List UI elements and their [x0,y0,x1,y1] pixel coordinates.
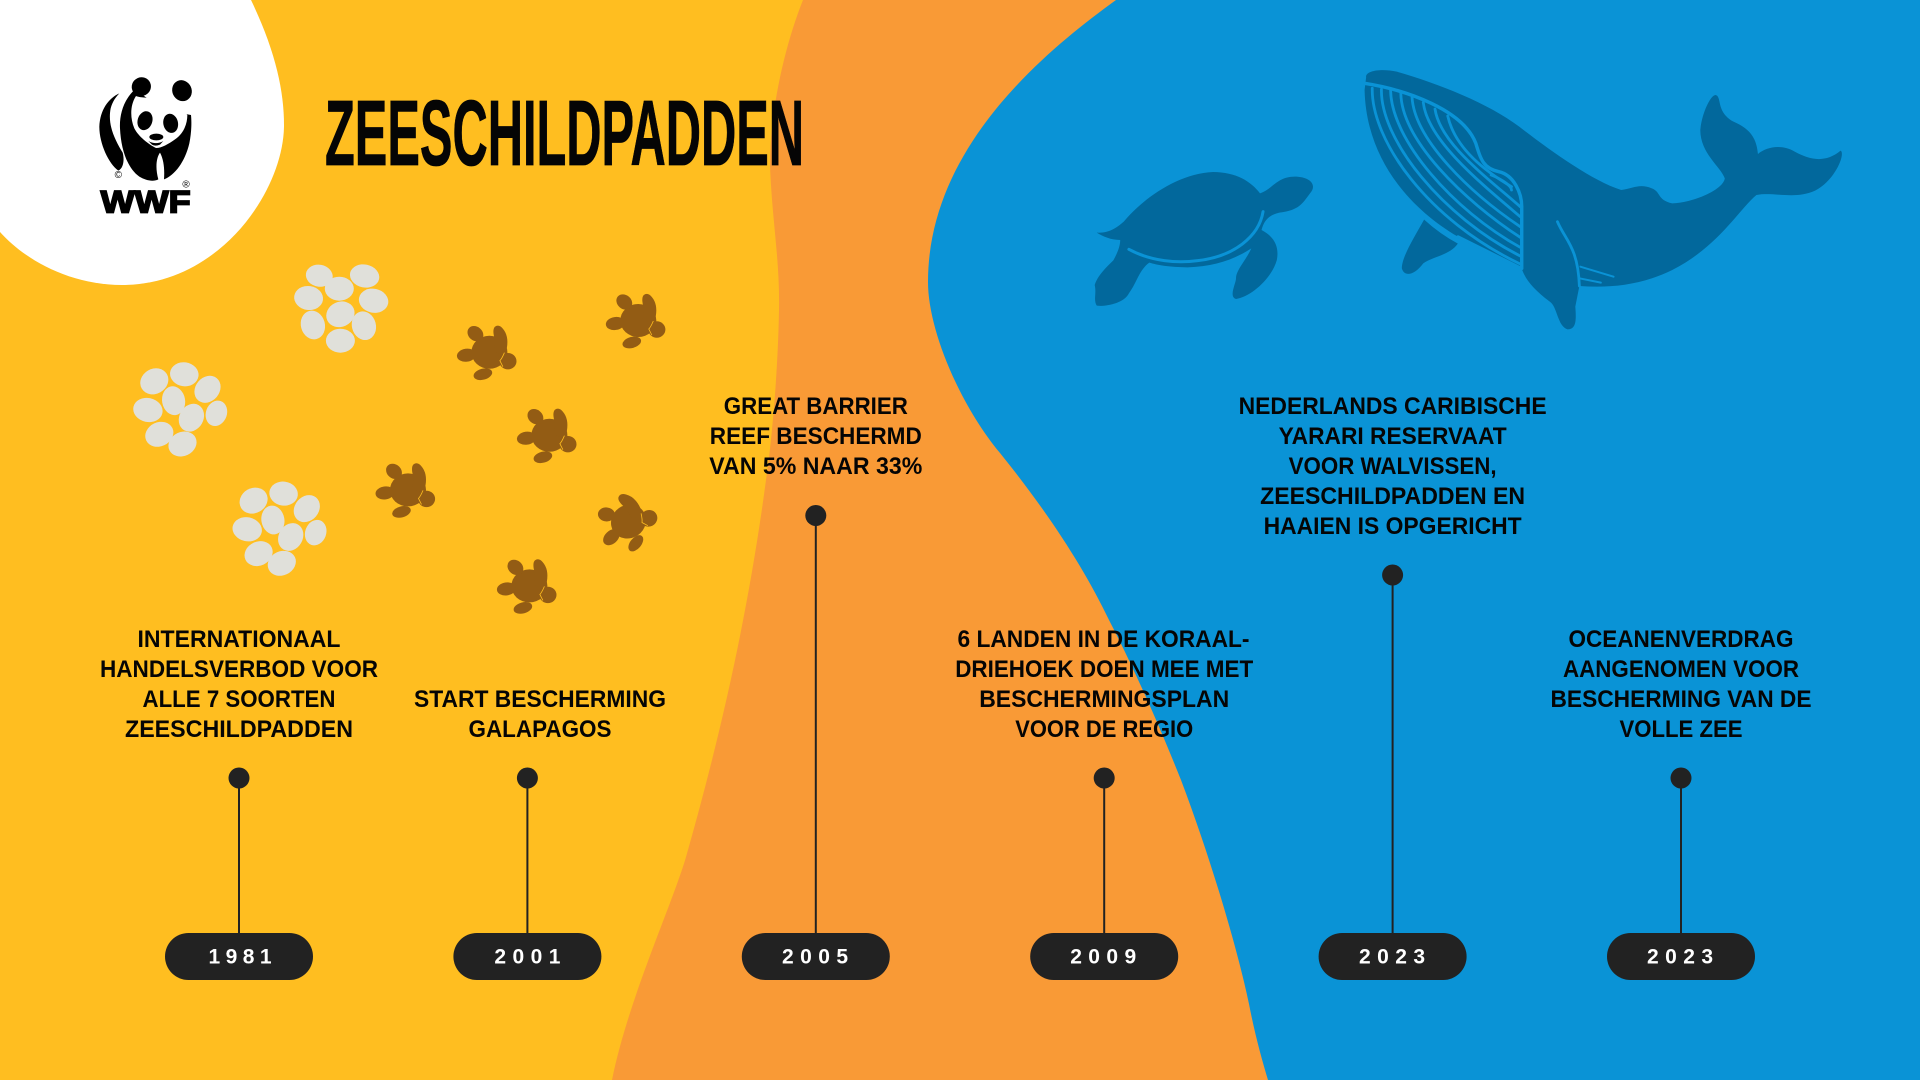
pill: 2009 [1030,933,1178,980]
turtle eggs: cluster top [293,262,391,353]
text: 2023 Yarari event: VOOR WALVISSEN, [1289,453,1497,480]
timeline item: 2009 [955,626,1254,980]
timeline item: 2005 [709,393,922,980]
text: 2009 event [955,626,1254,743]
pill: 2009: 2009 [1070,946,1136,968]
text: 2009 event: DRIEHOEK DOEN MEE MET [955,656,1254,683]
text: 2001 event [414,686,666,743]
pill: 2023 first: 2023 [1359,946,1425,968]
text: 1981 event: INTERNATIONAAL [138,626,340,653]
marker: 2009 stem [1094,768,1115,934]
text: 2023 Yarari event: HAAIEN IS OPGERICHT [1264,513,1522,540]
text: 2009 event: BESCHERMINGSPLAN [979,686,1229,713]
text: 2009 event: VOOR DE REGIO [1015,716,1193,743]
timeline item: 2023 Yarari [1239,393,1547,980]
text: 2023 Yarari event: ZEESCHILDPADDEN EN [1260,483,1525,510]
pill: 2023 second [1607,933,1755,980]
timeline item: 1981 [100,626,378,980]
background: blue ocean [928,0,1920,1080]
text: 2023 Oceanenverdrag event: OCEANENVERDRAG [1568,626,1794,653]
text: 2009 event: 6 LANDEN IN DE KORAAL- [958,626,1250,653]
pill: 2005: 2005 [782,946,848,968]
whale throat grooves [1365,83,1614,286]
pill: 1981: 1981 [208,946,272,968]
pill: 2023 second: 2023 [1647,946,1713,968]
pill: 2001 [453,933,601,980]
pill: 2005 [742,933,890,980]
text: 2005 event [709,393,922,480]
icon: WWF panda logo: © [115,170,123,181]
text: 1981 event [100,626,378,743]
text: 1981 event: HANDELSVERBOD VOOR [100,656,378,683]
text: 1981 event: ALLE 7 SOORTEN [142,686,336,713]
text: 2023 Oceanenverdrag event: VOLLE ZEE [1620,716,1742,743]
marker: 2023 Yarari stem [1382,564,1403,934]
whale body [1365,70,1842,329]
marker: 2005 stem [805,505,826,934]
marker: 2023 Oceanenverdrag stem [1670,768,1692,934]
turtle eggs: cluster bottom [230,480,330,580]
text: 2001 event: GALAPAGOS [468,716,612,743]
hatchling turtles [375,291,668,616]
icon: sea turtle silhouette [1095,172,1313,306]
text: 2005 event: GREAT BARRIER [724,393,908,420]
timeline item: 2001 [414,686,666,980]
icon: humpback whale silhouette [1365,70,1842,329]
text: 2023 Yarari event: NEDERLANDS CARIBISCHE [1239,393,1547,420]
marker: 1981 stem [228,768,250,934]
turtle eggs: cluster left [131,360,231,461]
title: ZEESCHILDPADDEN [325,81,804,185]
icon: WWF panda logo: ® [182,179,190,190]
icon: WWF panda logo: WWF [101,185,191,220]
text: 2023 Oceanenverdrag event: BESCHERMING VAN DE [1550,686,1812,713]
white logo blob [0,0,284,285]
text: 2023 Oceanenverdrag event [1550,626,1812,743]
text: 1981 event: ZEESCHILDPADDEN [125,716,353,743]
timeline item: 2023 Oceanenverdrag [1550,626,1812,980]
pill: 2001: 2001 [494,946,561,968]
text: 2001 event: START BESCHERMING [414,686,666,713]
pill: 2023 first [1319,933,1467,980]
text: 2023 Oceanenverdrag event: AANGENOMEN VOOR [1563,656,1799,683]
text: 2005 event: VAN 5% NAAR 33% [709,453,922,480]
whale rear flipper [1402,218,1458,274]
text: 2023 Yarari event: YARARI RESERVAAT [1279,423,1507,450]
icon: WWF panda logo [99,74,195,220]
text: 2005 event: REEF BESCHERMD [710,423,922,450]
marker: 2001 stem [517,768,538,934]
text: 2023 Yarari event [1239,393,1547,540]
pill: 1981 [165,933,313,980]
background: orange band [612,0,1300,1080]
